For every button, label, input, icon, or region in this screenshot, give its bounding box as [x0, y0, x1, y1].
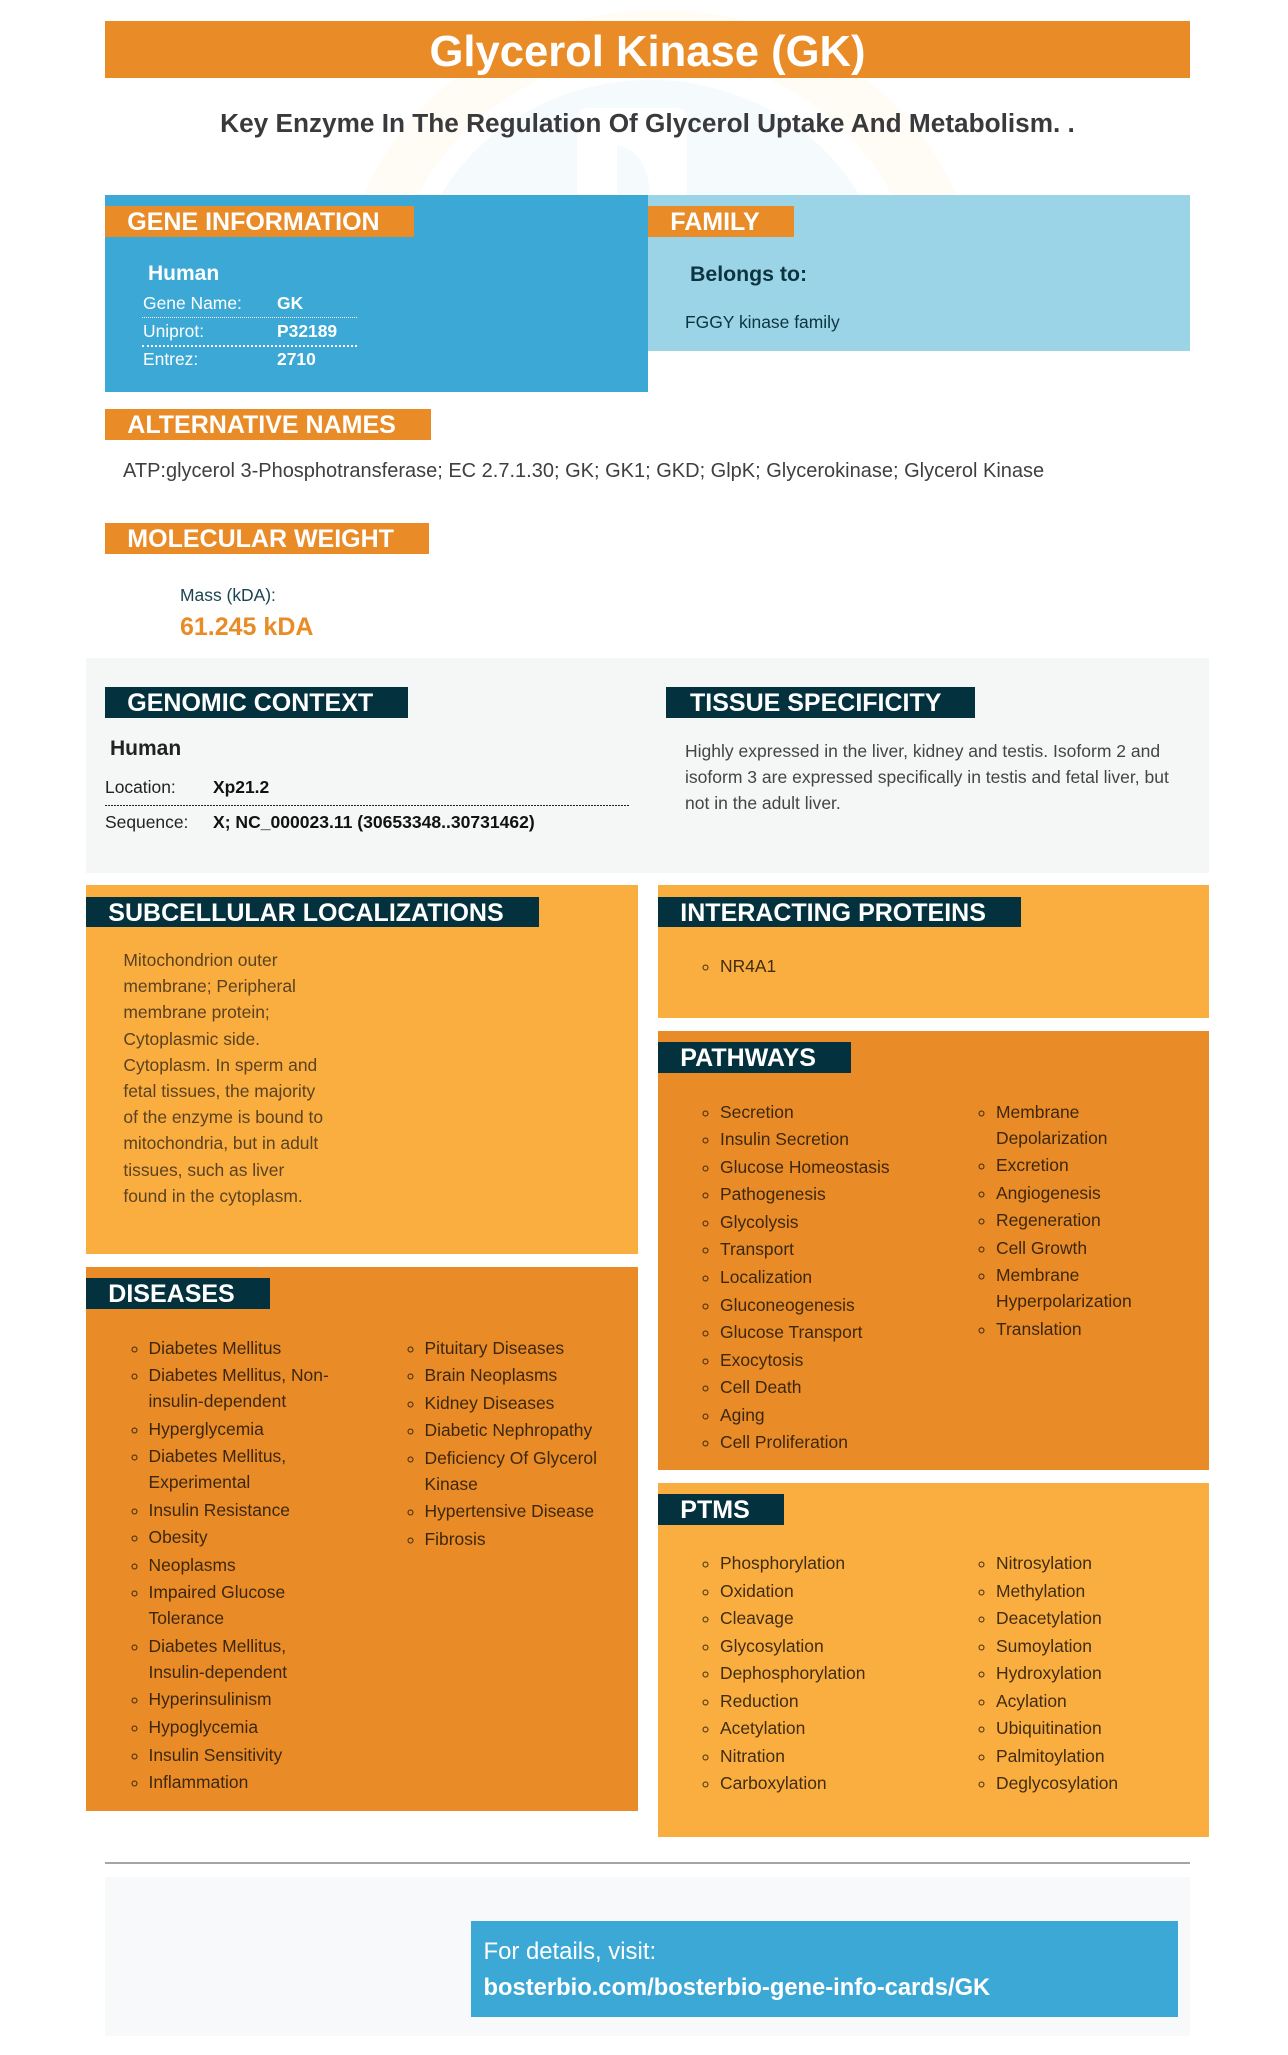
PTMs list column 1: Glycosylation: [720, 1636, 824, 1656]
PTMs list column 1: Cleavage: [720, 1608, 794, 1628]
subcellular text: Cytoplasm. In sperm and: [123, 1055, 317, 1075]
diseases list column 1: Tolerance: [148, 1608, 224, 1628]
diseases list column 1: Hyperglycemia: [148, 1419, 264, 1439]
species label: Human: [110, 737, 181, 760]
heading: molecular weight: MOLECULAR WEIGHT: [127, 525, 394, 553]
diseases list column 2: Kinase: [424, 1474, 478, 1494]
heading: genomic context: GENOMIC CONTEXT: [127, 689, 373, 717]
diseases list column 1: Neoplasms: [148, 1555, 236, 1575]
PTMs list column 2: Sumoylation: [996, 1636, 1092, 1656]
species label: Human: [148, 262, 219, 285]
heading: diseases: [86, 1278, 270, 1309]
panel: pathways: [658, 1031, 1209, 1470]
diseases list column 1: Insulin-dependent: [148, 1662, 287, 1682]
panel: subcellular localizations: [86, 885, 638, 1254]
heading: subcellular localizations: SUBCELLULAR LOCALIZATIONS: [108, 899, 504, 927]
diseases list column 2: Diabetic Nephropathy: [424, 1420, 592, 1440]
pathways list column 2: Cell Growth: [996, 1238, 1087, 1258]
diseases list column 1: Inflammation: [148, 1772, 248, 1792]
pathways list column 2: Membrane: [996, 1265, 1079, 1285]
alternative names text: ATP:glycerol 3-Phosphotransferase; EC 2.7.1.30; GK; GK1; GKD; GlpK; Glycerokinase; Glycerol Kinase: [123, 460, 1044, 482]
location row: Location:: [105, 777, 176, 797]
PTMs list column 2: Hydroxylation: [996, 1663, 1102, 1683]
gene name row: GK: [277, 293, 303, 313]
family name: FGGY kinase family: [685, 312, 840, 332]
diseases list column 1: Impaired Glucose: [148, 1582, 285, 1602]
diseases list column 2: Deficiency Of Glycerol: [424, 1448, 597, 1468]
details label: For details, visit:: [484, 1938, 656, 1965]
details url: bosterbio.com/bosterbio-gene-info-cards/GK: [484, 1974, 990, 2001]
subcellular text: fetal tissues, the majority: [123, 1081, 315, 1101]
belongs to label: Belongs to:: [690, 262, 807, 286]
PTMs list column 1: Dephosphorylation: [720, 1663, 865, 1683]
diseases list column 2: Brain Neoplasms: [424, 1365, 557, 1385]
pathways list column 1: Transport: [720, 1239, 794, 1259]
subtitle: Key Enzyme In The Regulation Of Glycerol Uptake And Metabolism. .: [220, 108, 1075, 138]
heading: pathways: PATHWAYS: [680, 1044, 816, 1072]
diseases list column 1: Experimental: [148, 1472, 250, 1492]
diseases list column 2: [408, 1338, 597, 1549]
pathways list column 2: Excretion: [996, 1155, 1069, 1175]
uniprot row: P32189: [277, 321, 337, 341]
heading: gene information: GENE INFORMATION: [127, 208, 380, 236]
panel: footer: [105, 1877, 1190, 2036]
heading: PTMs: [658, 1494, 784, 1525]
title banner: Glycerol Kinase (GK): [429, 28, 866, 76]
pathways list column 1: Glycolysis: [720, 1212, 798, 1232]
pathways list column 1: [702, 1102, 890, 1452]
subcellular text: Cytoplasmic side.: [123, 1029, 260, 1049]
panel: gene information: [105, 195, 648, 392]
diseases list column 1: Diabetes Mellitus, Non-: [148, 1365, 329, 1385]
gene name row: [143, 293, 303, 313]
pathways list column 2: Translation: [996, 1319, 1082, 1339]
panel: family: [648, 195, 1190, 351]
mass label: Mass (kDA):: [180, 585, 276, 605]
heading: interacting proteins: INTERACTING PROTEINS: [680, 899, 986, 927]
heading: PTMs: PTMS: [680, 1496, 750, 1524]
watermark logo: [364, 10, 956, 195]
tissue specificity text: isoform 3 are expressed specifically in testis and fetal liver, but: [685, 767, 1169, 787]
pathways list column 2: Hyperpolarization: [996, 1291, 1132, 1311]
heading: family: [648, 206, 794, 237]
subcellular text: found in the cytoplasm.: [123, 1186, 303, 1206]
mass value: 61.245 kDA: [180, 613, 313, 641]
PTMs list column 1: Reduction: [720, 1691, 799, 1711]
molecular weight values: [180, 585, 313, 641]
diseases list column 1: Insulin Sensitivity: [148, 1745, 282, 1765]
diseases list column 1: Diabetes Mellitus,: [148, 1446, 286, 1466]
pathways list column 1: Aging: [720, 1405, 765, 1425]
heading: diseases: DISEASES: [108, 1280, 235, 1308]
PTMs list column 2: Ubiquitination: [996, 1718, 1102, 1738]
PTMs list column 2: Acylation: [996, 1691, 1067, 1711]
pathways list column 1: Localization: [720, 1267, 812, 1287]
subcellular text: of the enzyme is bound to: [123, 1107, 323, 1127]
tissue specificity text: Highly expressed in the liver, kidney and testis. Isoform 2 and: [685, 741, 1160, 761]
PTMs list column 2: [978, 1553, 1118, 1793]
uniprot row: Uniprot:: [143, 321, 204, 341]
pathways list column 1: Gluconeogenesis: [720, 1295, 855, 1315]
location row: [105, 777, 269, 797]
PTMs list column 2: Methylation: [996, 1581, 1085, 1601]
PTMs list column 2: Nitrosylation: [996, 1553, 1092, 1573]
subcellular text: membrane protein;: [123, 1002, 270, 1022]
PTMs list column 1: Oxidation: [720, 1581, 794, 1601]
PTMs list column 2: Deacetylation: [996, 1608, 1102, 1628]
sequence row: X; NC_000023.11 (30653348..30731462): [213, 812, 535, 832]
entrez row: [143, 349, 316, 369]
pathways list column 1: Glucose Homeostasis: [720, 1157, 890, 1177]
pathways list column 1: Pathogenesis: [720, 1184, 826, 1204]
panel: diseases: [86, 1267, 638, 1811]
subcellular text: mitochondria, but in adult: [123, 1133, 318, 1153]
diseases list column 1: Diabetes Mellitus: [148, 1338, 281, 1358]
pathways list column 1: Cell Death: [720, 1377, 801, 1397]
subcellular text: [123, 950, 323, 1206]
tissue specificity text: not in the adult liver.: [685, 793, 841, 813]
diseases list column 1: Obesity: [148, 1527, 208, 1547]
pathways list column 2: [978, 1102, 1132, 1339]
heading: tissue specificity: TISSUE SPECIFICITY: [690, 689, 941, 717]
diseases list column 1: [132, 1338, 329, 1792]
PTMs list column 1: Nitration: [720, 1746, 785, 1766]
diseases list column 2: Pituitary Diseases: [424, 1338, 564, 1358]
diseases list column 1: insulin-dependent: [148, 1391, 286, 1411]
panel: interacting proteins: [658, 885, 1209, 1018]
pathways list column 2: Membrane: [996, 1102, 1079, 1122]
pathways list column 2: Angiogenesis: [996, 1183, 1101, 1203]
title banner: [105, 21, 1190, 78]
diseases list column 2: Hypertensive Disease: [424, 1501, 594, 1521]
panel: PTMs: [658, 1483, 1209, 1837]
diseases list column 2: Kidney Diseases: [424, 1393, 554, 1413]
PTMs list column 1: Acetylation: [720, 1718, 805, 1738]
tissue specificity text: [685, 741, 1169, 813]
diseases list column 1: Hyperinsulinism: [148, 1689, 272, 1709]
diseases list column 1: Insulin Resistance: [148, 1500, 290, 1520]
location row: Xp21.2: [213, 777, 269, 797]
panel: genomic context and tissue specificity: [86, 658, 1209, 873]
subcellular text: Mitochondrion outer: [123, 950, 278, 970]
heading: pathways: [658, 1042, 851, 1073]
sequence row: Sequence:: [105, 812, 188, 832]
pathways list column 2: Depolarization: [996, 1128, 1107, 1148]
PTMs list column 1: Carboxylation: [720, 1773, 827, 1793]
PTMs list column 2: Palmitoylation: [996, 1746, 1105, 1766]
heading: alternative names: ALTERNATIVE NAMES: [127, 411, 396, 439]
diseases list column 1: Diabetes Mellitus,: [148, 1636, 286, 1656]
entrez row: 2710: [277, 349, 316, 369]
pathways list column 2: Regeneration: [996, 1210, 1101, 1230]
PTMs list column 2: Deglycosylation: [996, 1773, 1118, 1793]
PTMs list column 1: [702, 1553, 865, 1793]
subcellular text: tissues, such as liver: [123, 1160, 284, 1180]
interacting proteins list: NR4A1: [720, 956, 776, 976]
uniprot row: [143, 321, 337, 341]
pathways list column 1: Secretion: [720, 1102, 794, 1122]
diseases list column 1: Hypoglycemia: [148, 1717, 258, 1737]
entrez row: Entrez:: [143, 349, 198, 369]
pathways list column 1: Exocytosis: [720, 1350, 803, 1370]
PTMs list column 1: Phosphorylation: [720, 1553, 845, 1573]
pathways list column 1: Cell Proliferation: [720, 1432, 848, 1452]
heading: family: FAMILY: [670, 208, 760, 236]
gene name row: Gene Name:: [143, 293, 242, 313]
diseases list column 2: Fibrosis: [424, 1529, 486, 1549]
pathways list column 1: Insulin Secretion: [720, 1129, 849, 1149]
pathways list column 1: Glucose Transport: [720, 1322, 862, 1342]
subcellular text: membrane; Peripheral: [123, 976, 296, 996]
callout: details link: [471, 1921, 1178, 2017]
